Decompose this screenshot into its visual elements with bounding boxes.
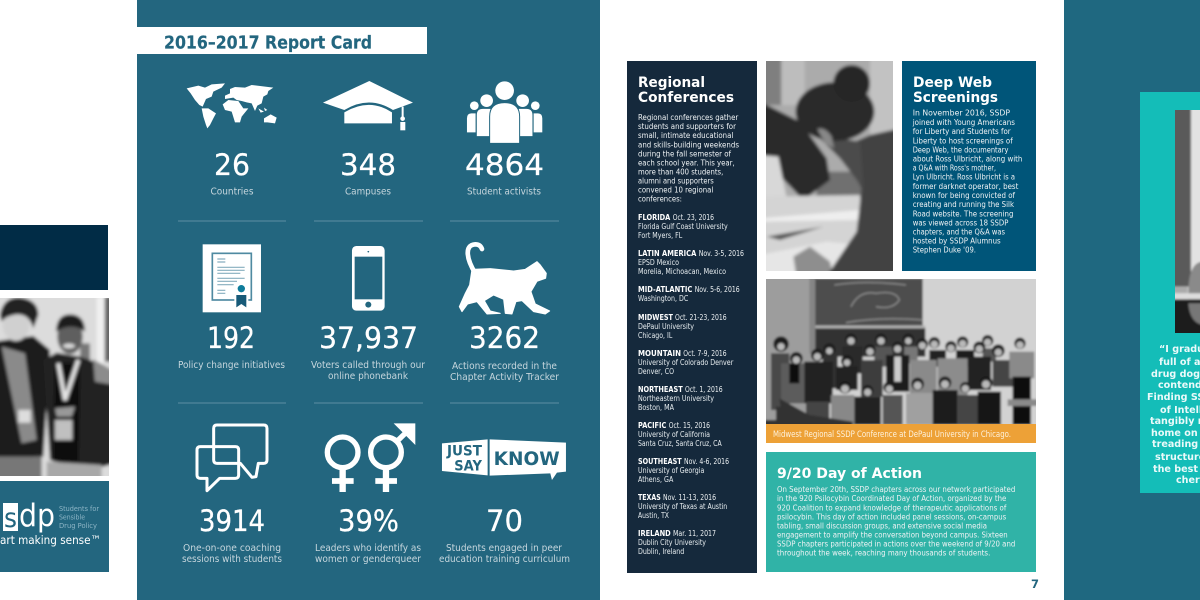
stat: policy change xyxy=(178,321,285,371)
stat: campuses: 348 xyxy=(340,148,396,182)
stat: voters called: 37,937 xyxy=(319,321,418,355)
conference: Mountain: MOUNTAIN xyxy=(638,348,681,358)
body text: about Ross Ulbricht, along with xyxy=(913,154,1022,164)
body text: In November 2016, SSDP xyxy=(913,108,1010,118)
conference: Latin America: Morelia, Michoacan, Mexico xyxy=(638,267,726,276)
stat: leaders: Leaders who identify as xyxy=(315,543,421,554)
icon: speech bubbles xyxy=(197,425,267,491)
intro text: and skills-building weekends xyxy=(638,139,739,149)
intro text: alumni and supporters xyxy=(638,176,714,186)
conference: Latin America xyxy=(638,248,744,276)
panel: right page fragment xyxy=(1064,0,1200,600)
heading: Deep Web xyxy=(913,75,992,91)
stat: coaching sessions: sessions with students xyxy=(182,554,282,565)
panel: regional conferences xyxy=(627,61,757,573)
body text: Road website. The screening xyxy=(913,208,1013,218)
photo: two students xyxy=(0,298,109,476)
stat: peer education: education training curriculum xyxy=(439,554,570,565)
icon: gender symbols xyxy=(327,423,415,492)
testimonial quote xyxy=(1147,344,1200,486)
panel: deep web screenings xyxy=(902,61,1036,271)
stat: leaders xyxy=(315,504,421,565)
heading: 9/20 Day of Action xyxy=(777,466,922,482)
stat: student activists: 4864 xyxy=(465,148,544,182)
conference list xyxy=(638,212,744,556)
logo block: dp xyxy=(19,498,55,534)
stat: actions recorded xyxy=(450,321,559,383)
stat: coaching sessions: 3914 xyxy=(199,504,265,538)
icon: just say know: JUST xyxy=(446,444,482,460)
conference: Pacific: Oct. 15, 2016 xyxy=(669,420,710,430)
body text: engagement to amplify the conversation beyond campus. Sixteen xyxy=(777,529,1008,539)
stat: voters called xyxy=(311,321,425,382)
intro text: conferences: xyxy=(638,194,682,204)
body text: was viewed across 18 SSDP xyxy=(913,217,1008,227)
testimonial quote: drug dog xyxy=(1151,369,1200,380)
stat: leaders: 39% xyxy=(338,504,399,538)
icon: group of people xyxy=(467,81,542,143)
conference: Northeast: NORTHEAST xyxy=(638,384,683,394)
conference: Latin America: Nov. 3-5, 2016 xyxy=(699,248,744,258)
stat: voters called: Voters called through our xyxy=(311,360,425,371)
conference: Northeast: Northeastern University xyxy=(638,394,714,403)
conference: Ireland xyxy=(638,528,716,556)
body text: known for being convicted of xyxy=(913,190,1016,200)
navy header block xyxy=(0,225,108,290)
testimonial quote: the best xyxy=(1153,464,1198,475)
logo block xyxy=(0,481,109,572)
panel background xyxy=(902,61,1036,271)
body text: psilocybin. This day of action included panel sessions, on-campus xyxy=(777,511,1006,521)
icon: just say know: SAY xyxy=(454,459,483,475)
stat: voters called: online phonebank xyxy=(328,371,408,382)
body text: Lyn Ulbricht. Ross Ulbricht is a xyxy=(913,172,1015,182)
stat: peer education: Students engaged in peer xyxy=(446,543,562,554)
body text: On September 20th, SSDP chapters across our network participated xyxy=(777,484,1015,494)
icon: certificate xyxy=(203,244,261,312)
conference: Pacific xyxy=(638,420,722,448)
conference: Texas: Nov. 11-13, 2016 xyxy=(663,492,716,502)
stat: actions recorded: Chapter Activity Tracker xyxy=(450,372,559,383)
icon: smartphone xyxy=(352,246,385,311)
body text: creating and running the Silk xyxy=(913,199,1014,209)
body text: SSDP chapters participated in actions over the weekend of 9/20 and xyxy=(777,538,1015,548)
conference: Mountain: University of Colorado Denver xyxy=(638,358,734,367)
intro text: small, intimate educational xyxy=(638,130,733,140)
heading xyxy=(638,75,734,106)
logo background xyxy=(0,481,109,572)
stat: countries xyxy=(210,148,254,198)
heading: Screenings xyxy=(913,90,998,106)
body text: former darknet operator, best xyxy=(913,181,1019,191)
panel background xyxy=(627,61,757,573)
logo block: Drug Policy xyxy=(59,522,97,530)
conference: Florida xyxy=(638,212,728,240)
conference: Latin America: EPSD Mexico xyxy=(638,258,679,267)
body text: tabling, small discussion groups, and extensive social media xyxy=(777,520,987,530)
stat: policy change: 192 xyxy=(207,321,255,355)
body text xyxy=(912,108,1022,254)
title bar xyxy=(137,27,427,54)
stat: student activists: Student activists xyxy=(467,186,541,198)
photo: woman studying papers xyxy=(766,61,893,271)
page number: 7 xyxy=(1031,577,1039,591)
body text xyxy=(777,484,1015,558)
stat: coaching sessions xyxy=(182,504,282,565)
conference: Northeast xyxy=(638,384,723,412)
stat: policy change: Policy change initiatives xyxy=(178,360,285,371)
conference: Latin America: LATIN AMERICA xyxy=(638,248,697,258)
conference: Mountain xyxy=(638,348,734,376)
intro text: convened 10 regional xyxy=(638,185,713,195)
body text: a Q&A with Ross's mother, xyxy=(913,163,996,173)
stat: actions recorded: Actions recorded in the xyxy=(452,361,557,372)
stat: countries: 26 xyxy=(214,148,250,182)
conference: Midwest: MIDWEST xyxy=(638,312,673,322)
logo block: Sensible xyxy=(59,514,85,522)
conference: Texas: TEXAS xyxy=(638,492,661,502)
conference: Florida: FLORIDA xyxy=(638,212,671,222)
body text: in the 920 Psilocybin Coordinated Day of Action, organized by the xyxy=(777,493,1006,503)
conference: Midwest: DePaul University xyxy=(638,322,694,331)
conference: Florida: Florida Gulf Coast University xyxy=(638,222,728,231)
testimonial quote: cher xyxy=(1176,475,1200,486)
conference: Pacific: University of California xyxy=(638,430,710,439)
title bar: 2016–2017 Report Card xyxy=(164,34,372,54)
conference: Mountain: Oct. 7-9, 2016 xyxy=(683,348,727,358)
conference: Southeast: Nov. 4-6, 2016 xyxy=(684,456,729,466)
conference: Ireland: Mar. 11, 2017 xyxy=(673,528,716,538)
conference: Northeast: Boston, MA xyxy=(638,403,675,412)
panel: 2016-2017 report card xyxy=(137,0,600,600)
body text: chapters, and the Q&A was xyxy=(913,226,1005,236)
intro text: Regional conferences gather xyxy=(638,112,739,122)
conference: Texas xyxy=(638,492,727,520)
conference: Midwest xyxy=(638,312,727,340)
icon: graduation cap xyxy=(323,81,413,130)
stat: campuses: Campuses xyxy=(345,186,391,198)
body text: Deep Web, the documentary xyxy=(913,144,1009,154)
conference: Pacific: PACIFIC xyxy=(638,420,666,430)
stat: peer education xyxy=(439,504,570,565)
photo: portrait fragment xyxy=(1175,110,1200,333)
dividers xyxy=(178,221,559,403)
intro text: during the fall semester of xyxy=(638,148,732,158)
panel: 9/20 day of action xyxy=(766,452,1036,572)
stat: peer education: 70 xyxy=(486,504,523,538)
conference: Midwest: Chicago, IL xyxy=(638,331,673,340)
conference: Ireland: IRELAND xyxy=(638,528,671,538)
conference: Mid-Atlantic: Nov. 5-6, 2016 xyxy=(695,284,740,294)
icon: just say know: KNOW xyxy=(494,449,560,470)
heading: Conferences xyxy=(638,90,734,106)
stat: student activists xyxy=(465,148,544,198)
caption bar: Midwest Regional SSDP Conference at DePaul University in Chicago. xyxy=(773,430,1011,440)
heading xyxy=(913,75,998,106)
conference: Mountain: Denver, CO xyxy=(638,367,674,376)
conference: Florida: Fort Myers, FL xyxy=(638,231,683,240)
intro text: students and supporters for xyxy=(638,121,737,131)
heading: Regional xyxy=(638,75,705,91)
logo mark xyxy=(3,503,18,531)
panel background xyxy=(766,452,1036,572)
body text: hosted by SSDP Alumnus xyxy=(913,236,1001,246)
conference: Texas: University of Texas at Austin xyxy=(638,502,727,511)
testimonial box xyxy=(1140,92,1200,493)
stat: coaching sessions: One-on-one coaching xyxy=(183,543,281,554)
body text: Stephen Duke '09. xyxy=(913,244,976,254)
body text: joined with Young Americans xyxy=(912,117,1015,127)
conference: Ireland: Dublin, Ireland xyxy=(638,547,684,556)
body text: 920 Coalition to expand knowledge of therapeutic applications of xyxy=(777,502,1007,512)
conference: Ireland: Dublin City University xyxy=(638,538,706,547)
conference: Midwest: Oct. 21-23, 2016 xyxy=(675,312,727,322)
conference: Southeast: Athens, GA xyxy=(638,475,674,484)
stat: countries: Countries xyxy=(210,186,254,198)
intro text xyxy=(638,112,739,204)
stat: campuses xyxy=(340,148,396,198)
icon: just say know xyxy=(442,439,566,480)
intro text: each school year. This year, xyxy=(638,157,735,167)
conference: Southeast: University of Georgia xyxy=(638,466,705,475)
conference: Southeast: SOUTHEAST xyxy=(638,456,682,466)
icon: cat xyxy=(459,244,550,314)
photo: midwest conference group xyxy=(766,279,1036,424)
panel background xyxy=(1064,0,1200,600)
conference: Texas: Austin, TX xyxy=(638,511,670,520)
stat: actions recorded: 3262 xyxy=(469,321,540,355)
panel background xyxy=(137,0,600,600)
panel: left page fragment xyxy=(0,225,117,572)
stat: leaders: women or genderqueer xyxy=(315,554,421,565)
conference: Northeast: Oct. 1, 2016 xyxy=(685,384,723,394)
body text: for Liberty and Students for xyxy=(913,126,1011,136)
conference: Pacific: Santa Cruz, Santa Cruz, CA xyxy=(638,439,722,448)
conference: Mid-Atlantic: MID-ATLANTIC xyxy=(638,284,692,294)
conference: Southeast xyxy=(638,456,729,484)
logo wordmark: Students for xyxy=(59,505,99,513)
caption bar xyxy=(766,424,1036,443)
icon: world map xyxy=(187,83,277,128)
intro text: more than 400 students, xyxy=(638,166,723,176)
logo block: s xyxy=(4,503,17,534)
tagline: art making sense™ xyxy=(0,533,101,547)
conference: Mid-Atlantic: Washington, DC xyxy=(638,294,688,303)
body text: throughout the week, reaching many thousands of students. xyxy=(777,548,990,558)
conference: Florida: Oct. 23, 2016 xyxy=(673,212,714,222)
conference: Mid-Atlantic xyxy=(638,284,740,303)
body text: Liberty to host screenings of xyxy=(913,135,1014,145)
